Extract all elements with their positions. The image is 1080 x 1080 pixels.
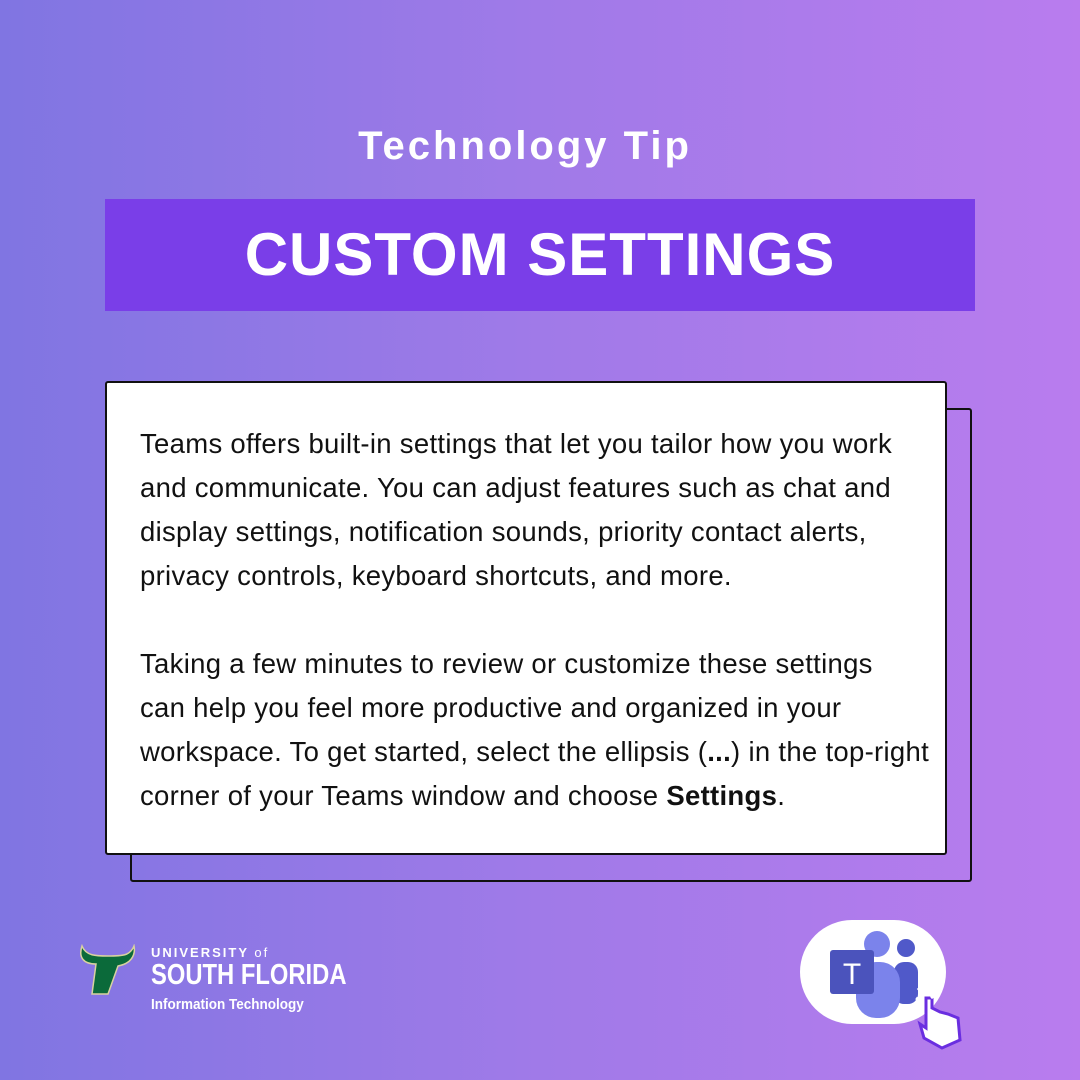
title bar	[105, 199, 975, 311]
text card	[105, 381, 947, 855]
paragraph 2: corner of your Teams window and choose Settings.	[140, 780, 785, 811]
subtitle: Technology Tip	[358, 124, 692, 168]
paragraph 1: privacy controls, keyboard shortcuts, and more.	[140, 560, 732, 591]
logo text: UNIVERSITY of	[151, 945, 269, 960]
icon: Teams logo with cursor: T	[843, 958, 861, 991]
paragraph 1: Teams offers built-in settings that let you tailor how you work	[140, 428, 892, 459]
paragraph 2: Taking a few minutes to review or customize these settings	[140, 648, 873, 679]
icon: Teams logo with cursor	[800, 920, 962, 1050]
paragraph 1: display settings, notification sounds, priority contact alerts,	[140, 516, 867, 547]
paragraph 2: can help you feel more productive and organized in your	[140, 692, 841, 723]
logo text: Information Technology	[151, 996, 304, 1013]
paragraph 1: and communicate. You can adjust features such as chat and	[140, 472, 891, 503]
title bar: CUSTOM SETTINGS	[245, 221, 835, 288]
logo text: SOUTH FLORIDA	[151, 959, 347, 991]
logo text	[151, 945, 347, 1013]
paragraph 2: workspace. To get started, select the ellipsis (...) in the top-right	[140, 736, 929, 767]
USF logo	[80, 944, 347, 1013]
card shadow frame	[130, 408, 972, 882]
paragraph 2	[140, 648, 929, 811]
paragraph 1	[140, 428, 892, 591]
icon: bull horns	[80, 944, 136, 995]
